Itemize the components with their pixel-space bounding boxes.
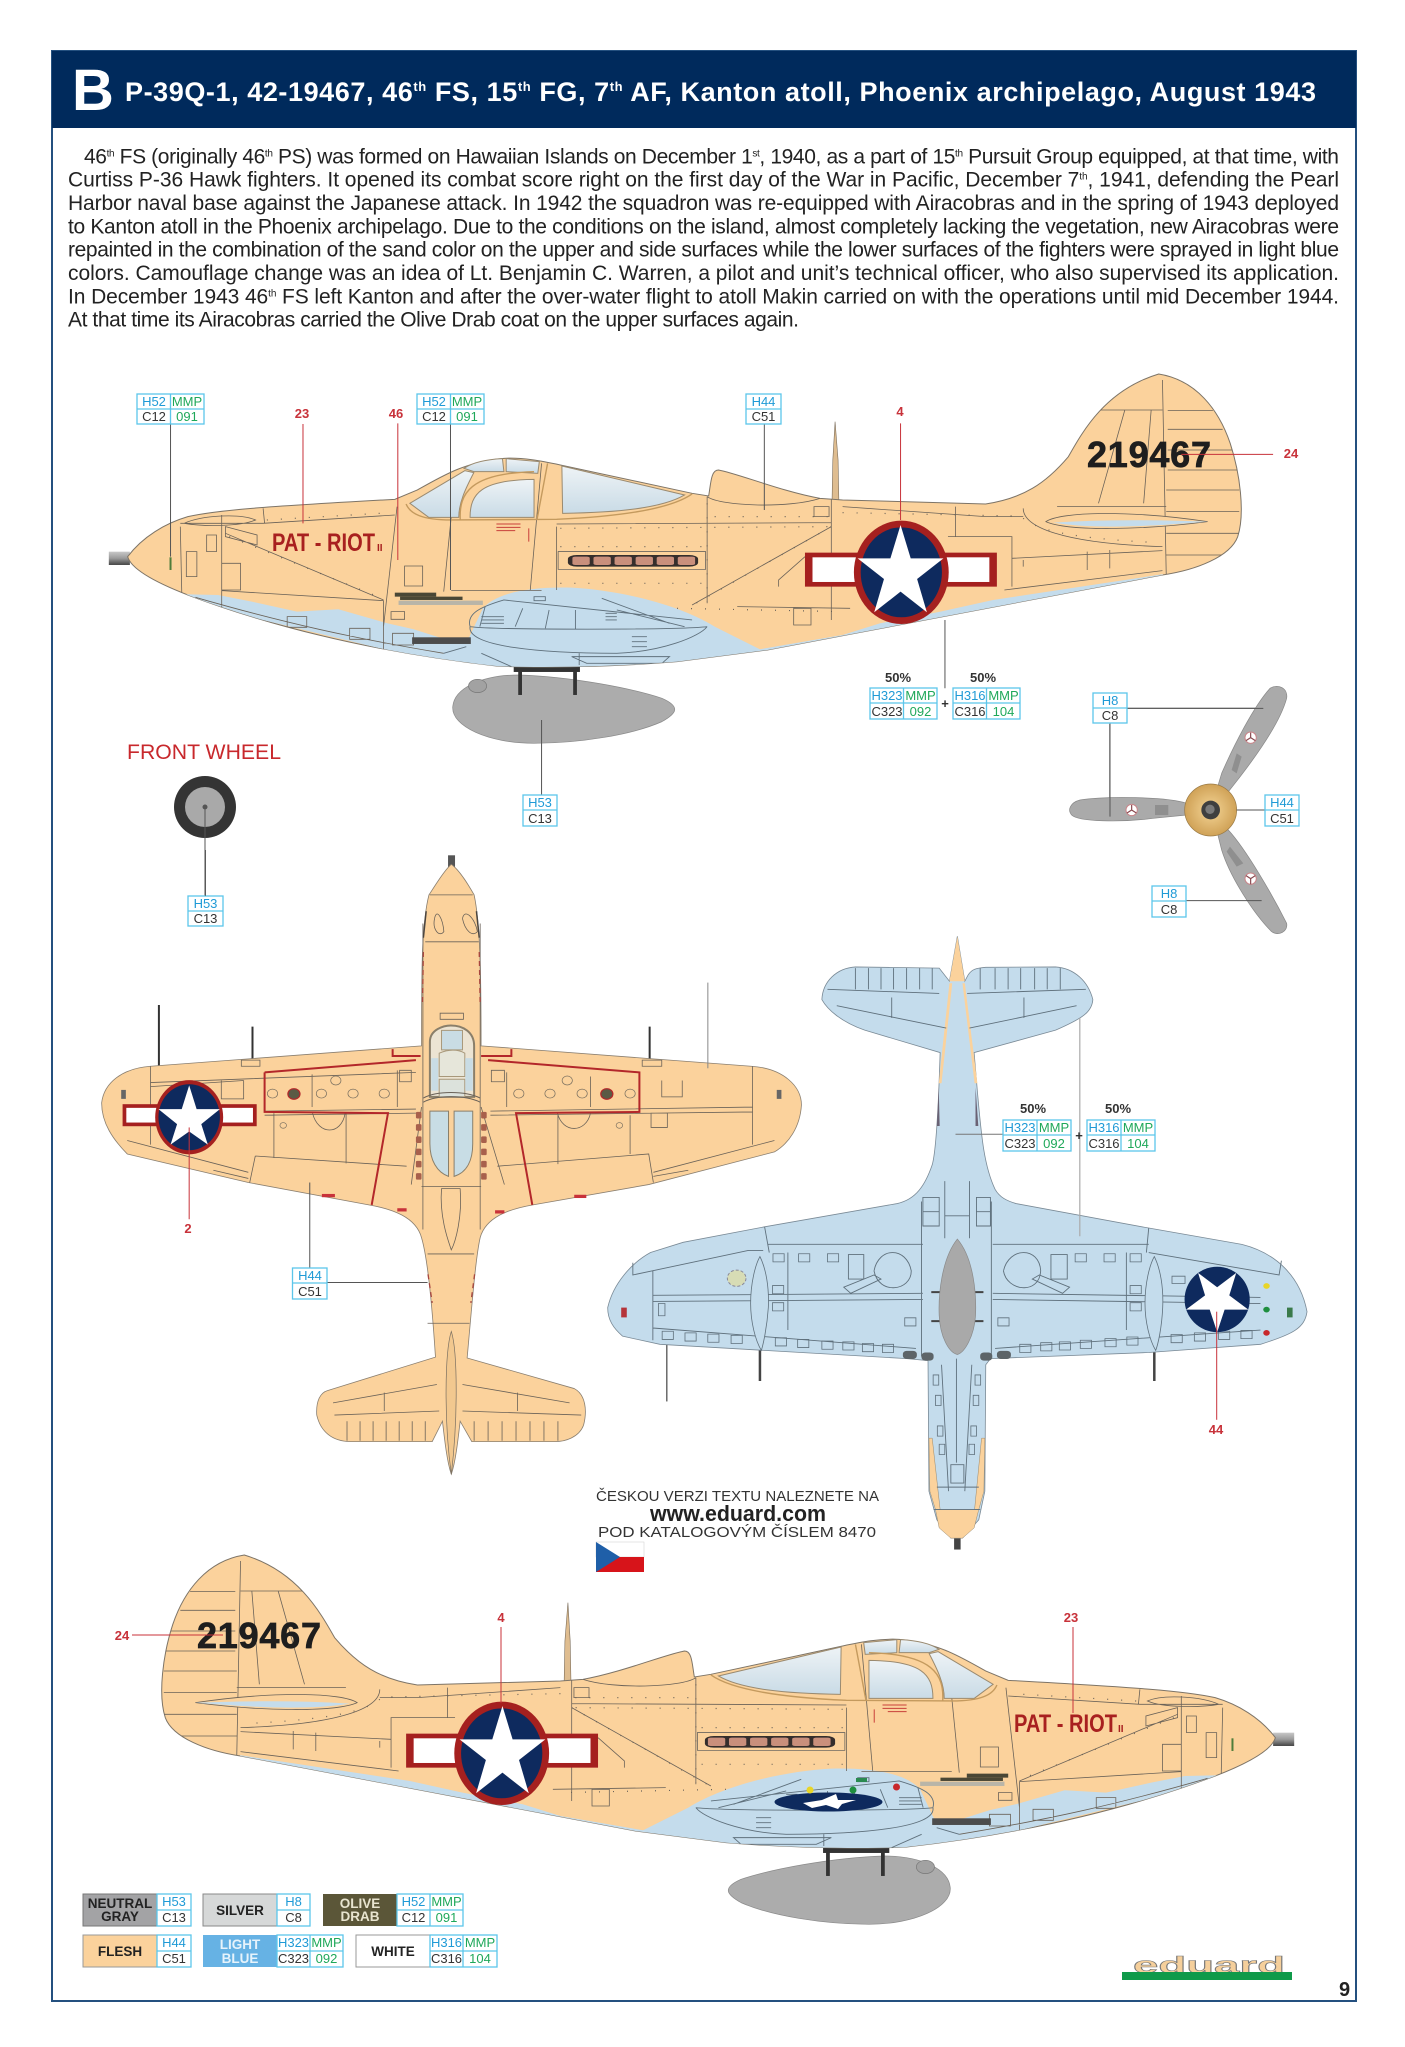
guns: [395, 593, 483, 644]
swatch light blue: LIGHT: [220, 1937, 261, 1952]
nose art upper profile: II: [377, 543, 383, 554]
mix label lower view: 092: [1043, 1136, 1065, 1151]
history text block: [68, 146, 1339, 332]
wing gun ports: [288, 1089, 613, 1099]
nose green mark: [170, 557, 172, 570]
paint code H44 C51: H44: [752, 394, 775, 409]
wingtip lights: [121, 1090, 781, 1099]
callout numbers upper profile: 4: [896, 404, 904, 419]
paint code H44 C51: C51: [752, 409, 775, 424]
leaders upper profile: [171, 423, 1273, 810]
swatch silver: H8: [285, 1894, 302, 1909]
paint code H52 C12 nose: MMP: [172, 394, 202, 409]
red wing markers: [322, 1194, 586, 1214]
swatch olive drab: 091: [436, 1910, 457, 1925]
blue paint: [180, 574, 1174, 677]
swatch neutral gray: [83, 1894, 191, 1926]
callout numbers upper profile: 46: [389, 406, 403, 421]
spinner centre: [1201, 801, 1220, 819]
swatch neutral gray: H53: [162, 1894, 186, 1909]
flat insignia: [774, 1792, 882, 1812]
history text block: th: [1079, 172, 1088, 182]
swatch light blue: [203, 1935, 343, 1967]
paint code H53 tank: H53: [528, 795, 552, 810]
panel lines top: [127, 895, 774, 1441]
antenna mast: [832, 422, 839, 500]
mix label lower view: [1003, 1101, 1155, 1151]
history text block: FS left Kanton and after the over-water flight to atoll Makin carried on with the operations until mid December 1944.: [276, 286, 1339, 308]
paint code H53 tank: [523, 795, 557, 826]
paint code H52 C12 cockpit: C12: [422, 409, 446, 424]
paint code H44 top view: [292, 1268, 327, 1299]
callout line 2: [188, 1127, 190, 1219]
paint code H8 bottom: [1152, 886, 1186, 917]
intake bumps: [903, 1351, 1011, 1361]
paint code H8 bottom: C8: [1161, 902, 1177, 917]
national insignia: [805, 521, 997, 624]
leader to lower surface: [707, 983, 709, 1068]
tank filler cap: [469, 679, 487, 693]
swatch neutral gray: GRAY: [101, 1909, 139, 1924]
small hatches underside: [658, 1254, 1252, 1454]
paint code H44 C51: [746, 394, 781, 424]
blade upper: [1217, 686, 1287, 796]
czech version note: [596, 1488, 879, 1541]
mix label lower view: C316: [1088, 1136, 1120, 1151]
paint code H52 C12 nose: 091: [176, 409, 198, 424]
swatch olive drab: [323, 1894, 463, 1926]
mix label lower view: MMP: [1123, 1120, 1153, 1135]
callout number 2: 2: [184, 1221, 192, 1236]
history text block: repainted in the combination of the sand color on the upper and side surfaces while the lower surfaces of the fighters were sprayed in light blue: [68, 238, 1339, 262]
paint legend: [83, 1894, 497, 1967]
fuselage red side markings: [422, 952, 480, 1303]
airframe top: [102, 864, 801, 1474]
mix label lower view: 50%: [1105, 1101, 1131, 1116]
prop leaders: [1110, 708, 1265, 901]
tank struts: [514, 666, 580, 695]
marker spokes: [1127, 733, 1255, 884]
paint code H52 C12 cockpit: MMP: [452, 394, 482, 409]
history text block: At that time its Airacobras carried the Olive Drab coat on the upper surfaces again.: [68, 308, 799, 332]
history text block: to Kanton atoll in the Phoenix archipelago. Due to the conditions on the island, almost completely lacking the vegetation, new Airacobras were: [68, 216, 1339, 238]
leaders underside: [1079, 1018, 1081, 1236]
header title: th: [413, 79, 426, 94]
history text block: In December 1943 46: [68, 286, 268, 308]
underwing details on right profile: [774, 1778, 900, 1812]
fuselage code upper profile: 219467: [1087, 434, 1211, 475]
panel lines: [180, 380, 1241, 653]
aircraft: top view: [102, 850, 801, 1474]
wing root lines: [444, 597, 707, 667]
paint code H53 wheel: C13: [194, 911, 217, 926]
history text block: FS (originally 46: [114, 146, 265, 168]
swatch neutral gray: NEUTRAL: [88, 1896, 152, 1911]
paint code H44 prop: [1265, 795, 1299, 826]
history text block: , 1940, as a part of 15: [759, 146, 955, 168]
strut mounts: [931, 1292, 983, 1321]
mix label side view: MMP: [988, 688, 1019, 703]
mix label side view: C323: [871, 704, 903, 719]
swatch flesh: C51: [162, 1951, 186, 1966]
front wheel: [174, 776, 236, 896]
callout line 44: [1216, 1312, 1218, 1420]
mix label side view: +: [941, 696, 949, 711]
swatch light blue: H323: [278, 1935, 309, 1950]
mix label side view: H323: [871, 688, 903, 703]
paint code H44 top view: H44: [298, 1268, 322, 1283]
swatch light blue: MMP: [311, 1935, 342, 1950]
history text block: PS) was formed on Hawaiian Islands on December 1: [273, 146, 753, 168]
history text block: Harbor naval base against the Japanese attack. In 1942 the squadron was re-equipped with Airacobras and in the spring of 1943 deployed: [68, 192, 1339, 215]
airframe underside: [608, 936, 1307, 1538]
swatch olive drab: DRAB: [340, 1909, 380, 1924]
mix label lower view: 104: [1127, 1136, 1149, 1151]
paint code H52 C12 nose: H52: [142, 394, 166, 409]
swatch silver: SILVER: [216, 1903, 264, 1918]
blade stencils: [1155, 753, 1243, 867]
swatch olive drab: MMP: [431, 1894, 462, 1909]
nose art lower profile: II: [1118, 1724, 1124, 1735]
history text block: colors. Camouflage change was an idea of Lt. Benjamin C. Warren, a pilot and unit’s technical officer, who also supervised its application.: [68, 262, 1339, 285]
header band: [52, 51, 1356, 128]
paint code H52 C12 cockpit: H52: [422, 394, 446, 409]
gun port ring: [727, 1270, 746, 1286]
mix label lower view: H323: [1004, 1120, 1036, 1135]
mix label side view: MMP: [905, 688, 936, 703]
wing lights: [806, 1778, 900, 1794]
callout numbers lower profile: [115, 1610, 1078, 1643]
hub: [1185, 784, 1237, 836]
fin top view: [446, 1331, 456, 1474]
front wheel heading: FRONT WHEEL: [127, 741, 281, 764]
swatch silver: C8: [285, 1910, 302, 1925]
paint code H53 wheel: [188, 896, 223, 926]
mix label lower view: MMP: [1039, 1120, 1069, 1135]
rivet lines: [229, 503, 1159, 612]
header title: AF, Kanton atoll, Phoenix archipelago, August 1943: [623, 77, 1316, 107]
mix label side view: 50%: [970, 670, 996, 685]
history text block: 46: [84, 146, 107, 168]
blade lower: [1217, 826, 1287, 934]
swatch silver: [203, 1894, 310, 1926]
blade left: [1070, 798, 1193, 821]
wing guns: [159, 1005, 650, 1065]
fuselage edge stencils: [423, 911, 479, 938]
swatch flesh: FLESH: [98, 1944, 142, 1959]
callout numbers lower profile: 24: [115, 1628, 130, 1643]
history text block: th: [955, 148, 963, 160]
leaders lower profile: [132, 1627, 1073, 1713]
position lights: [621, 1283, 1293, 1336]
paint code H52 C12 cockpit: [417, 394, 484, 424]
header title: FS, 15: [427, 77, 517, 107]
czech version note: ČESKOU VERZI TEXTU NALEZNETE NA: [596, 1488, 879, 1505]
callout number 44: 44: [1209, 1422, 1224, 1437]
paint code H52 C12 nose: C12: [142, 409, 166, 424]
mix label side view: 50%: [885, 670, 911, 685]
swatch olive drab: OLIVE: [340, 1896, 380, 1911]
wing cannon barrels: [760, 1350, 1154, 1381]
aircraft: right side profile: [162, 1555, 1294, 1924]
swatch white: MMP: [465, 1935, 495, 1950]
nose art lower profile: PAT - RIOT: [1014, 1710, 1117, 1738]
exhausts top view: [416, 1112, 487, 1180]
paint code H44 prop: C51: [1270, 811, 1294, 826]
callout numbers lower profile: 4: [497, 1610, 505, 1625]
swatch white: [356, 1935, 497, 1967]
canopy top view: [423, 1025, 480, 1250]
cockpit stencil: [496, 524, 529, 542]
blade tip markers: [1126, 732, 1256, 884]
flesh tail cap: [939, 936, 977, 1083]
filler caps: [267, 1076, 635, 1128]
paint code H44 prop: H44: [1270, 795, 1294, 810]
swatch light blue: C323: [278, 1951, 309, 1966]
spinner top: [448, 855, 455, 868]
page number: 9: [1339, 1979, 1350, 2001]
callout numbers upper profile: [295, 404, 1299, 461]
history text block: th: [107, 148, 115, 160]
horizontal stabiliser: [1046, 514, 1208, 529]
fuselage body: [128, 374, 1241, 667]
history text block: Pursuit Group equipped, at that time, with: [963, 146, 1339, 168]
flat star: [803, 1794, 856, 1809]
mix label lower view: C323: [1004, 1136, 1036, 1151]
swatch white: 104: [469, 1951, 491, 1966]
paint code H8 top: [1093, 693, 1127, 723]
exhaust stains: [937, 1087, 978, 1126]
paint code H8 top: C8: [1102, 708, 1118, 723]
history text block: th: [268, 288, 276, 300]
callout numbers upper profile: 23: [295, 406, 309, 421]
national insignia top view: [123, 1080, 257, 1154]
leader to mix label: [955, 1133, 1003, 1135]
mix label side view: 092: [910, 704, 931, 719]
mix label side view: C316: [954, 704, 986, 719]
national insignia underside: [1185, 1267, 1250, 1332]
czech version note: POD KATALOGOVÝM ČÍSLEM 8470: [598, 1524, 876, 1541]
swatch light blue: BLUE: [222, 1951, 258, 1966]
canopy glazing: [410, 459, 685, 517]
wing guns underside: [666, 1344, 668, 1401]
exhaust stacks: [558, 552, 706, 569]
drop tank underside: [939, 1239, 976, 1355]
swatch flesh: H44: [162, 1935, 186, 1950]
propeller: [1070, 686, 1287, 934]
swatch olive drab: C12: [402, 1910, 425, 1925]
eduard logo: [1122, 1952, 1292, 1980]
history text block: , 1941, defending the Pearl: [1088, 168, 1339, 192]
light blue undersurfaces and panel detail: [180, 380, 1241, 677]
eduard logo: eduard: [1133, 1952, 1285, 1978]
cockpit frame: [406, 463, 692, 520]
history text block: Curtiss P-36 Hawk fighters. It opened its combat score right on the first day of the War in Pacific, December 7: [68, 168, 1079, 192]
header title: FG, 7: [531, 77, 609, 107]
leaders top view: [205, 850, 428, 1282]
drop tank: [453, 675, 675, 743]
aircraft: underside view: [608, 936, 1307, 1550]
mix label lower view: H316: [1088, 1120, 1120, 1135]
swatch white: H316: [431, 1935, 462, 1950]
history text block: th: [265, 148, 273, 160]
mix label side view: [870, 670, 1020, 719]
callout numbers lower profile: 23: [1064, 1610, 1078, 1625]
swatch olive drab: H52: [402, 1894, 425, 1909]
paint code H44 top view: C51: [298, 1284, 322, 1299]
swatch flesh: [83, 1935, 191, 1967]
swatch light blue: 092: [316, 1951, 337, 1966]
mix label side view: H316: [954, 688, 986, 703]
spinner: [109, 552, 130, 565]
panel lines underside: [633, 968, 1281, 1510]
spinner underside: [954, 1538, 961, 1550]
mix label lower view: +: [1075, 1128, 1083, 1143]
paint code H53 wheel: H53: [194, 896, 217, 911]
header title: th: [518, 79, 531, 94]
history text block: st: [752, 148, 760, 160]
paint code H8 top: H8: [1102, 693, 1118, 708]
mix label lower view: 50%: [1020, 1101, 1046, 1116]
swatch white: WHITE: [371, 1944, 415, 1959]
paint code H8 bottom: H8: [1161, 886, 1177, 901]
swatch neutral gray: C13: [162, 1910, 186, 1925]
swatch white: C316: [431, 1951, 462, 1966]
fuselage code lower profile: 219467: [197, 1615, 321, 1656]
header title: th: [610, 79, 623, 94]
red wing walk stripes: [265, 1049, 639, 1205]
header letter B: B: [72, 58, 114, 123]
paint code H52 C12 nose: [137, 394, 204, 424]
mix label side view: 104: [993, 704, 1014, 719]
flesh nose: [929, 1438, 985, 1538]
header title: P-39Q-1, 42-19467, 46: [125, 77, 413, 107]
paint code H53 tank: C13: [528, 811, 552, 826]
paint code H52 C12 cockpit: 091: [456, 409, 478, 424]
callout numbers upper profile: 24: [1284, 446, 1299, 461]
nose art upper profile: PAT - RIOT: [272, 529, 375, 557]
main gear doors: [751, 1257, 1163, 1350]
aircraft: left side profile: [109, 374, 1241, 743]
czech version note: www.eduard.com: [649, 1501, 826, 1526]
czech flag: [596, 1542, 644, 1572]
